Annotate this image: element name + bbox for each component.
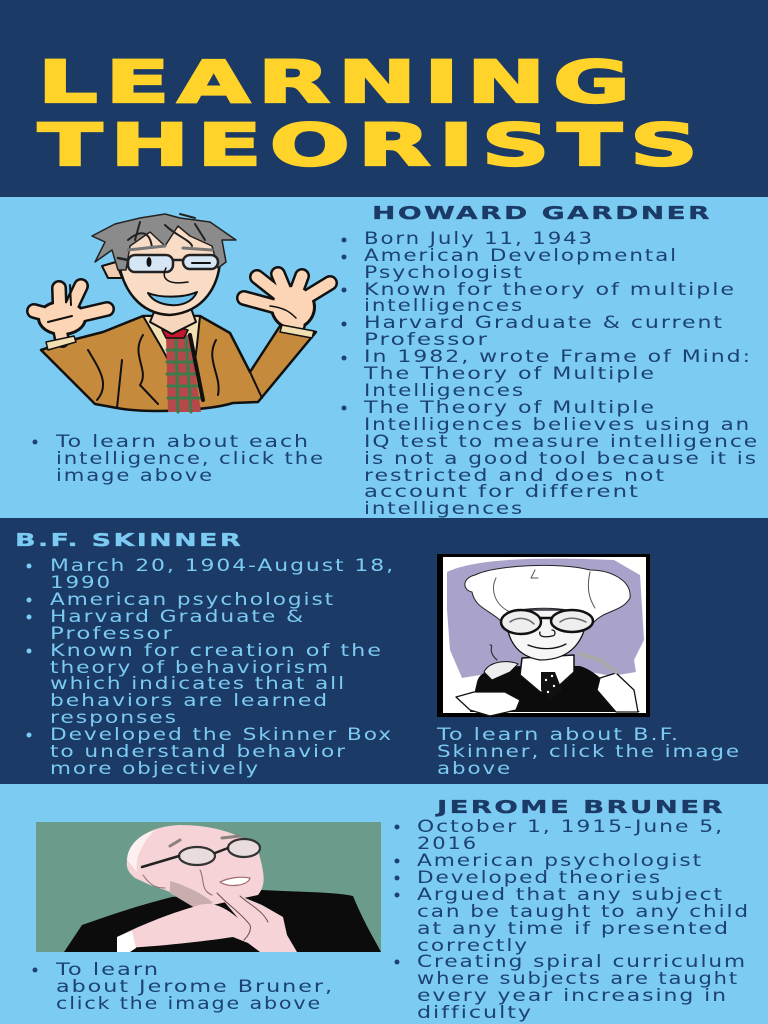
note: click the image: intelligence, click the xyxy=(56,449,325,469)
bullet list: Bruner facts: difficulty xyxy=(417,1003,533,1023)
panel: B.F. Skinner xyxy=(0,518,768,784)
panel: Howard Gardner xyxy=(0,197,768,519)
bullet list: Bruner facts: correctly xyxy=(417,936,529,956)
note: click the image: image above xyxy=(56,466,214,486)
panel: Jerome Bruner xyxy=(0,784,768,1024)
bullet list: Skinner facts xyxy=(26,556,395,779)
note: click the image: click the image above xyxy=(56,994,322,1014)
bullet list: Gardner facts: account for different xyxy=(364,482,640,502)
note: click the image: Skinner, click the image xyxy=(437,742,741,762)
bullet list: Gardner facts: Intelligences believes using an xyxy=(364,415,751,435)
heading: Jerome Bruner: JEROME BRUNER xyxy=(435,798,725,818)
bullet list: Bruner facts: at any time if presented xyxy=(417,919,730,939)
note: click the image xyxy=(436,725,741,779)
note: click the image: To learn xyxy=(55,960,160,980)
bullet list: Bruner facts: Argued that any subject xyxy=(417,885,724,905)
heading: B.F. Skinner: B.F. SKINNER xyxy=(15,531,243,551)
bullet list: Skinner facts: theory of behaviorism xyxy=(50,658,330,678)
bullet list: Gardner facts: In 1982, wrote Frame of Mind: xyxy=(364,347,752,367)
bullet list: Skinner facts: to understand behavior xyxy=(50,742,347,762)
bullet list: Bruner facts: 2016 xyxy=(417,834,478,854)
bullet list: Gardner facts: is not a good tool because it is xyxy=(364,449,758,469)
bullet list: Skinner facts: Known for creation of the xyxy=(50,641,383,661)
note: click the image: To learn about B.F. xyxy=(436,725,680,745)
illustration: caricature of B.F. Skinner xyxy=(437,554,650,717)
bullet list: Gardner facts: The Theory of Multiple xyxy=(363,364,656,384)
bullet list: Bruner facts: every year increasing in xyxy=(417,986,728,1006)
right hand xyxy=(244,274,330,330)
bullet list: Skinner facts: which indicates that all xyxy=(50,674,346,694)
bullet list: Bruner facts: can be taught to any child xyxy=(417,902,750,922)
bullet list: Gardner facts xyxy=(342,229,759,519)
note: click the image xyxy=(32,960,334,1014)
note: click the image xyxy=(32,432,325,486)
note: click the image: To learn about each xyxy=(55,432,310,452)
left hand xyxy=(34,285,107,340)
title: LEARNING xyxy=(38,48,638,116)
bullet list: Skinner facts: Developed the Skinner Box xyxy=(50,725,393,745)
bullet list: Gardner facts: The Theory of Multiple xyxy=(363,398,656,418)
bullet list: Skinner facts: responses xyxy=(50,708,178,728)
bullet list: Bruner facts xyxy=(394,817,750,1023)
note: click the image: about Jerome Bruner, xyxy=(56,977,334,997)
title: THEORISTS xyxy=(38,111,706,179)
illustration: cartoon of Howard Gardner xyxy=(34,214,330,412)
bullet list: Gardner facts: restricted and does not xyxy=(364,466,666,486)
bullet list: Bruner facts: American psychologist xyxy=(417,851,703,871)
bullet list: Skinner facts: Professor xyxy=(50,624,174,644)
bullet list: Skinner facts: March 20, 1904-August 18, xyxy=(50,556,395,576)
panel: title banner xyxy=(0,0,768,197)
illustration: portrait of Jerome Bruner xyxy=(36,822,381,952)
bullet list: Gardner facts: Intelligences xyxy=(364,381,525,401)
bullet list: Bruner facts: where subjects are taught xyxy=(417,969,739,989)
bullet list: Gardner facts: Psychologist xyxy=(364,263,524,283)
bullet list: Skinner facts: more objectively xyxy=(50,759,260,779)
heading: Howard Gardner: HOWARD GARDNER xyxy=(372,204,712,224)
bullet list: Gardner facts: intelligences xyxy=(364,499,524,519)
bullet list: Bruner facts: Developed theories xyxy=(417,868,662,888)
bullet list: Skinner facts: Harvard Graduate & xyxy=(50,607,305,627)
bullet list: Gardner facts: Professor xyxy=(364,330,489,350)
bullet list: Skinner facts: behaviors are learned xyxy=(50,691,329,711)
bullet list: Bruner facts: October 1, 1915-June 5, xyxy=(417,817,724,837)
bullet list: Gardner facts: intelligences xyxy=(364,296,524,316)
title xyxy=(38,48,706,179)
note: click the image: above xyxy=(437,759,512,779)
bullet list: Skinner facts: 1990 xyxy=(50,573,112,593)
bullet list: Gardner facts: American Developmental xyxy=(364,246,678,266)
bullet list: Skinner facts: American psychologist xyxy=(50,590,335,610)
bullet list: Gardner facts: Known for theory of multiple xyxy=(364,280,736,300)
bullet list: Bruner facts: Creating spiral curriculum xyxy=(417,952,747,972)
bullet list: Gardner facts: IQ test to measure intelligence xyxy=(364,432,759,452)
bullet list: Gardner facts: Born July 11, 1943 xyxy=(364,229,594,249)
bullet list: Gardner facts: Harvard Graduate & current xyxy=(364,313,724,333)
